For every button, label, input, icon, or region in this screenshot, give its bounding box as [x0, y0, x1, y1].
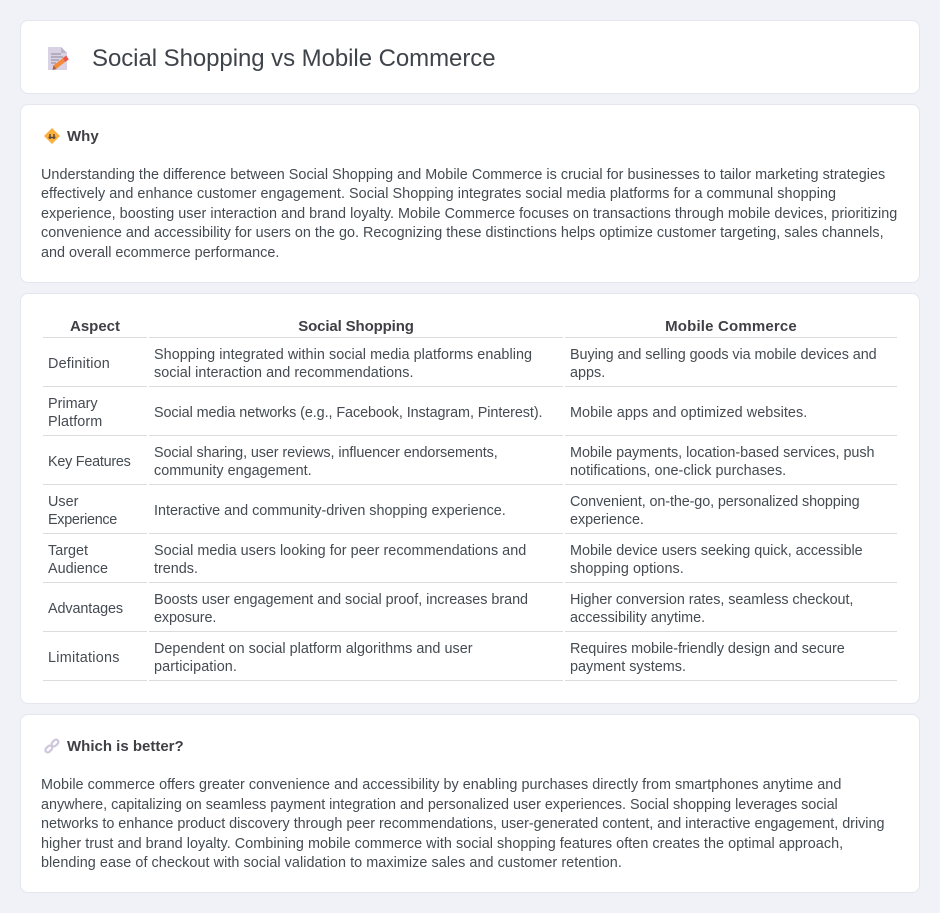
heading: why: Why	[67, 128, 99, 145]
row: key features: Mobile payments, location-based services, push	[570, 445, 875, 461]
icon: warning diamond	[44, 128, 60, 144]
row: key features: Social sharing, user reviews, influencer endorsements,	[154, 445, 498, 461]
text block: which is better: higher trust and brand loyalty. Combining mobile commerce with social shopping features often creates the optimal approach,	[41, 836, 843, 852]
row: definition: social interaction and recommendations.	[154, 365, 414, 381]
icon: chain link	[44, 738, 60, 754]
text block: why: experience, boosting user interaction and brand loyalty. Mobile Commerce focuses on transactions through mobile devices, prioritizing	[41, 206, 897, 222]
row: advantages	[48, 592, 853, 626]
text block: which is better	[41, 777, 884, 871]
panel: comparison table	[20, 293, 920, 704]
row: user experience: Experience	[48, 512, 117, 528]
icon: document with pencil	[48, 47, 69, 70]
text block: why: convenience and accessibility for users on the go. Recognizing these distinctions helps optimize customer targeting, sales channels,	[41, 225, 884, 241]
row: user experience: experience.	[570, 512, 644, 528]
text block: why: and overall ecommerce performance.	[41, 245, 279, 261]
title: Social Shopping vs Mobile Commerce	[92, 45, 495, 72]
text block: which is better: Mobile commerce offers greater convenience and accessibility by enabling purchases directly from smartphones anytime and	[41, 777, 841, 793]
row: target audience: Target	[48, 543, 88, 559]
table header: Aspect	[70, 318, 120, 335]
row: limitations: Requires mobile-friendly design and secure	[570, 641, 845, 657]
row: limitations: Limitations	[48, 650, 120, 666]
row: primary platform	[48, 396, 807, 430]
row: definition	[48, 347, 877, 381]
row: target audience: Social media users looking for peer recommendations and	[154, 543, 526, 559]
text block: which is better: anywhere, capitalizing on seamless payment integration and personalized user experiences. Social shopping leverages social	[41, 797, 838, 813]
heading: which is better: Which is better?	[67, 738, 184, 755]
row: target audience	[48, 543, 863, 577]
text block: which is better: networks to enhance product discovery through peer recommendations, user-generated content, and interactive engagement, driving	[41, 816, 884, 832]
row: key features: notifications, one-click purchases.	[570, 463, 786, 479]
row: primary platform: Social media networks (e.g., Facebook, Instagram, Pinterest).	[154, 405, 542, 421]
row: advantages: Higher conversion rates, seamless checkout,	[570, 592, 853, 608]
row: limitations: Dependent on social platform algorithms and user	[154, 641, 473, 657]
row: advantages: Advantages	[48, 601, 123, 617]
text block: which is better: blending ease of checkout with social validation to maximize sales and customer retention.	[41, 855, 622, 871]
row: user experience	[48, 494, 860, 528]
row: advantages: accessibility anytime.	[570, 610, 705, 626]
row: definition: apps.	[570, 365, 605, 381]
row: definition: Buying and selling goods via mobile devices and	[570, 347, 877, 363]
row: definition: Shopping integrated within social media platforms enabling	[154, 347, 532, 363]
row: target audience: Mobile device users seeking quick, accessible	[570, 543, 863, 559]
panel: why	[20, 104, 920, 283]
row: advantages: exposure.	[154, 610, 216, 626]
row: target audience: Audience	[48, 561, 108, 577]
row: target audience: trends.	[154, 561, 198, 577]
text block: why	[41, 167, 897, 261]
table header: Mobile Commerce	[665, 318, 797, 335]
row: target audience: shopping options.	[570, 561, 684, 577]
row: limitations: participation.	[154, 659, 237, 675]
row: key features	[48, 445, 875, 479]
row: user experience: User	[48, 494, 78, 510]
row: advantages: Boosts user engagement and social proof, increases brand	[154, 592, 528, 608]
row: limitations	[48, 641, 845, 675]
row: definition: Definition	[48, 356, 110, 372]
row: primary platform: Primary	[48, 396, 98, 412]
row: user experience: Convenient, on-the-go, personalized shopping	[570, 494, 860, 510]
panel: which is better	[20, 714, 920, 893]
row: user experience: Interactive and community-driven shopping experience.	[154, 503, 506, 519]
row: key features: community engagement.	[154, 463, 312, 479]
table header: Social Shopping	[298, 318, 414, 335]
text block: why: Understanding the difference between Social Shopping and Mobile Commerce is crucial for businesses to tailor marketing strategies	[41, 167, 885, 183]
row: key features: Key Features	[48, 454, 131, 470]
row: primary platform: Mobile apps and optimized websites.	[570, 405, 807, 421]
panel: title card	[20, 20, 920, 94]
table header	[70, 318, 797, 335]
text block: why: effectively and enhance customer engagement. Social Shopping integrates social media platforms for a communal shopping	[41, 186, 836, 202]
row: limitations: payment systems.	[570, 659, 686, 675]
row: primary platform: Platform	[48, 414, 102, 430]
